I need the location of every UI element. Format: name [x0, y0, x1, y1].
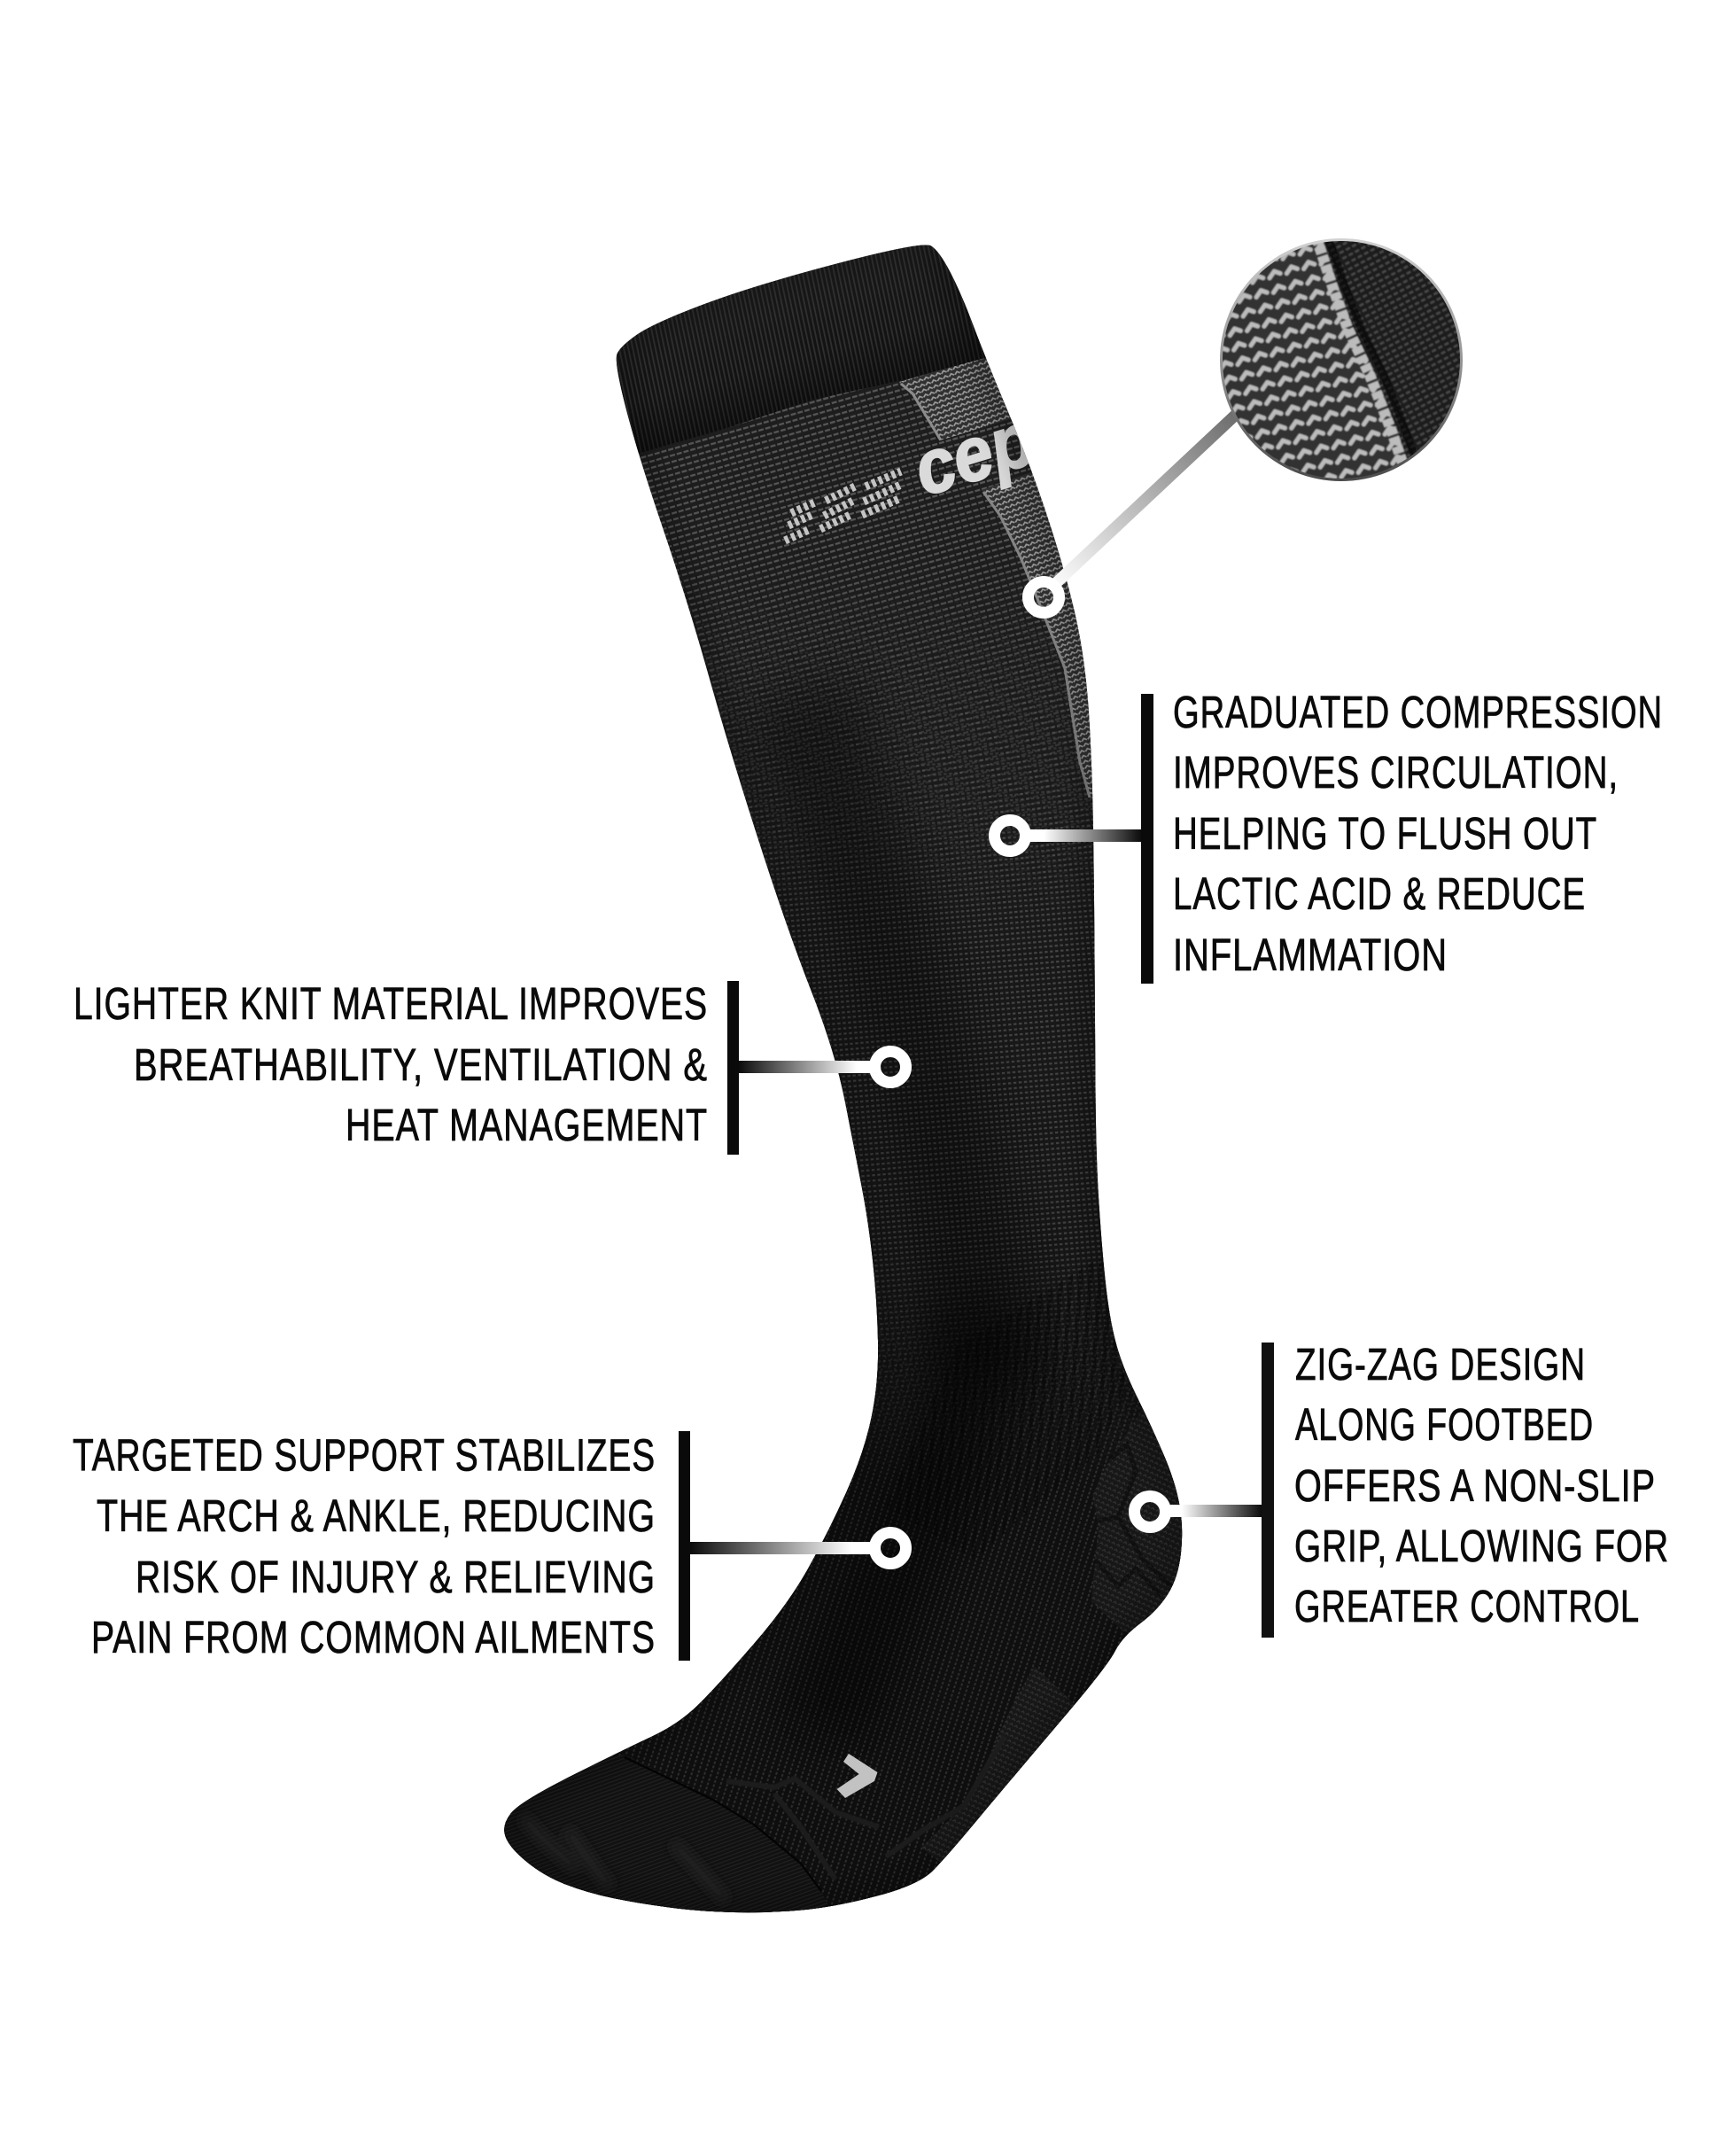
- text block: ALONG FOOTBED: [1295, 1399, 1594, 1450]
- sole strip: [921, 1666, 1076, 1870]
- edge darkening: [617, 245, 1182, 1862]
- callout: fabric close-up: [1028, 230, 1479, 613]
- sock body knit: [478, 230, 1205, 1923]
- callout: zig-zag design: [1134, 1339, 1669, 1638]
- fabric boundary: [1316, 237, 1403, 465]
- dark knit: [1323, 241, 1460, 459]
- marker ring: [1028, 581, 1060, 613]
- text block: [1294, 1339, 1669, 1631]
- lower leg finer knit: [504, 601, 1182, 1912]
- ankle ribbing: [888, 1261, 1124, 1558]
- connector: [1170, 1505, 1262, 1517]
- text block: TARGETED SUPPORT STABILIZES: [73, 1430, 656, 1480]
- compression sock: [478, 230, 1205, 1923]
- text block: [73, 1430, 656, 1662]
- text block: LACTIC ACID & REDUCE: [1173, 868, 1586, 919]
- dark streak along calf: [797, 691, 983, 1382]
- forefoot zig-zag lines: [726, 1736, 1005, 1880]
- text block: LIGHTER KNIT MATERIAL IMPROVES: [74, 978, 708, 1029]
- callout: lighter knit material: [74, 978, 905, 1155]
- fabric texture: [1223, 241, 1460, 479]
- dark streak over ankle: [824, 1312, 992, 1737]
- text block: RISK OF INJURY & RELIEVING: [136, 1552, 656, 1602]
- panel inner edge upper: [901, 384, 941, 440]
- marker ring: [875, 1051, 905, 1083]
- text block: INFLAMMATION: [1173, 930, 1448, 980]
- zig-zag ridges: [1095, 1444, 1171, 1595]
- text block: PAIN FROM COMMON AILMENTS: [91, 1612, 656, 1662]
- toe cap: [504, 1755, 829, 1912]
- logo wordmark: cep: [904, 396, 1044, 512]
- bracket: [679, 1431, 690, 1661]
- toe lobes: [527, 1822, 728, 1896]
- text block: BREATHABILITY, VENTILATION &: [134, 1039, 708, 1090]
- callout: targeted support: [73, 1430, 905, 1662]
- connector: [689, 1542, 870, 1554]
- foot chevron mark: [837, 1754, 877, 1798]
- bracket: [1141, 694, 1153, 984]
- foot knit: [504, 1280, 1182, 1912]
- connector: [738, 1061, 870, 1073]
- bracket: [727, 981, 739, 1155]
- text block: ZIG-ZAG DESIGN: [1295, 1339, 1586, 1389]
- text block: THE ARCH & ANKLE, REDUCING: [97, 1491, 656, 1541]
- bracket: [1262, 1343, 1274, 1638]
- cuff shading: [630, 331, 986, 454]
- connector: [1030, 829, 1142, 842]
- marker ring: [1134, 1496, 1166, 1528]
- connector to close-up: [1057, 412, 1239, 582]
- boundary shadow: [1329, 239, 1417, 465]
- grey mesh panel: [899, 357, 1100, 798]
- panel inner edge lower: [983, 492, 1090, 798]
- callout: graduated compression: [994, 687, 1663, 984]
- light mesh: [1223, 243, 1405, 479]
- close-up fabric: [1223, 241, 1460, 479]
- text block: HEAT MANAGEMENT: [346, 1100, 708, 1150]
- toe seam: [625, 1757, 821, 1891]
- marker ring: [994, 821, 1026, 851]
- heel zig-zag panel: [1091, 1354, 1182, 1632]
- top cuff: [617, 245, 986, 454]
- marker ring: [875, 1533, 905, 1563]
- text block: HELPING TO FLUSH OUT: [1173, 808, 1597, 859]
- tonal shading: [611, 876, 1143, 1907]
- close-up ring: [1220, 238, 1463, 481]
- logo band: [939, 418, 1032, 490]
- text block: [74, 978, 708, 1150]
- logo emblem: [785, 471, 901, 541]
- text block: [1173, 687, 1663, 980]
